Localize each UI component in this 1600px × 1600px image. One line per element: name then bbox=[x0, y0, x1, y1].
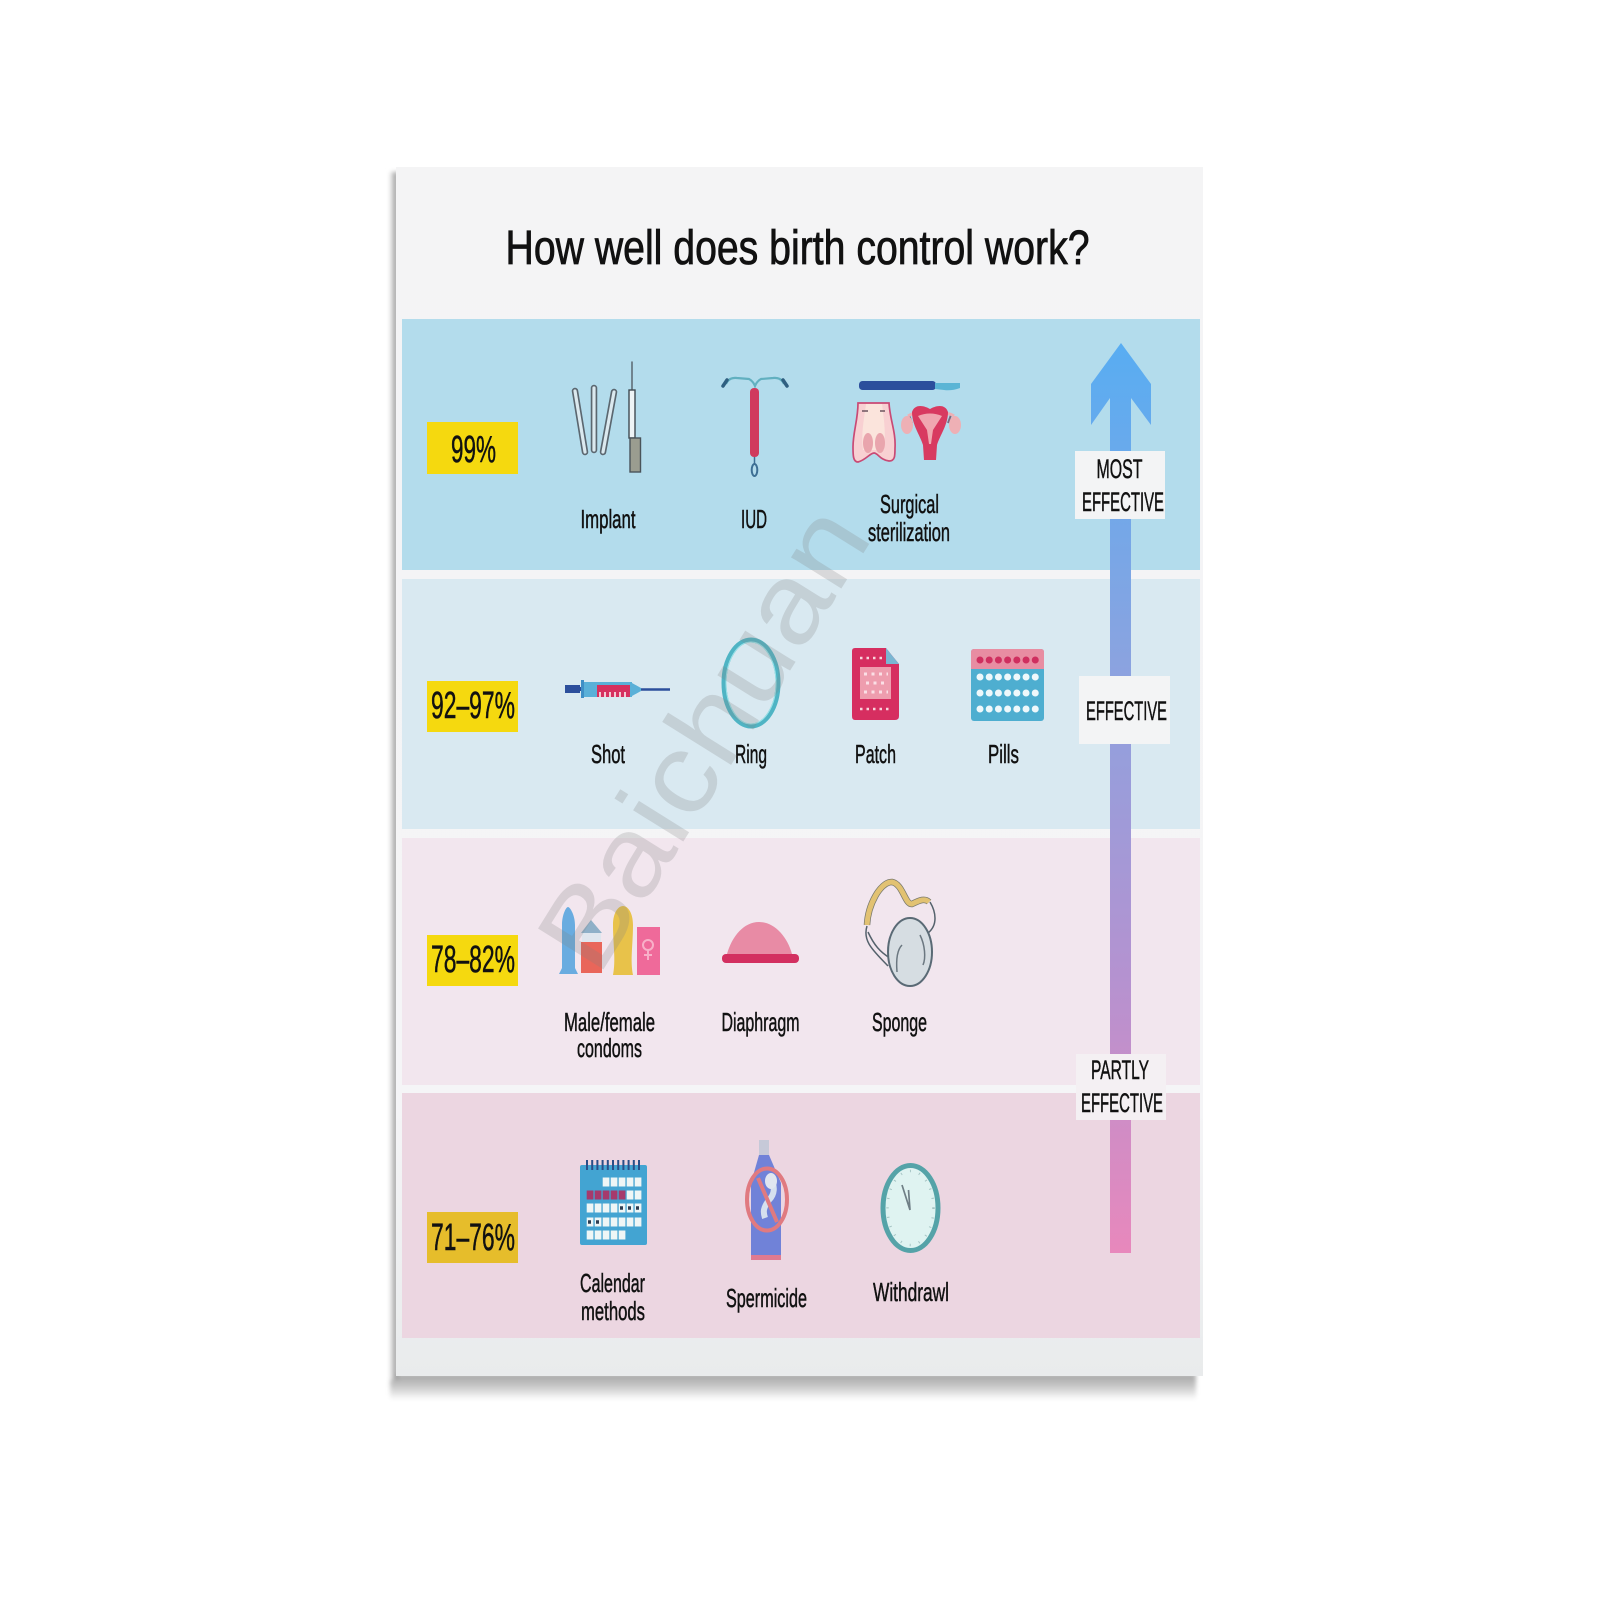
icon: patch bbox=[852, 648, 899, 720]
percentage badge: 78–82%: 78–82% bbox=[431, 939, 515, 981]
percentage badge: 71–76%: 71–76% bbox=[431, 1217, 515, 1259]
icon: pills bbox=[971, 649, 1044, 721]
poster shadow bbox=[389, 172, 1196, 1400]
label: Surgical sterilization bbox=[868, 489, 950, 547]
icon: ring bbox=[724, 640, 778, 726]
icon: implant bbox=[575, 362, 640, 472]
label: IUD: IUD bbox=[741, 504, 767, 534]
label: Surgical sterilization: Surgical bbox=[880, 489, 939, 519]
scale label: partly effective: EFFECTIVE bbox=[1081, 1088, 1163, 1118]
panel: 99% row bbox=[402, 319, 1200, 570]
icon: sponge bbox=[866, 882, 935, 986]
label: Spermicide: Spermicide bbox=[726, 1283, 807, 1313]
label: Calendar methods: Calendar bbox=[580, 1268, 645, 1298]
arrow: effectiveness scale bbox=[1091, 343, 1151, 1253]
scale label: effective: EFFECTIVE bbox=[1086, 696, 1167, 726]
panel: 71–76% row bbox=[402, 1093, 1200, 1338]
label: Male/female condoms bbox=[564, 1007, 655, 1063]
label: Shot: Shot bbox=[591, 739, 625, 769]
percentage badge: 71–76% bbox=[427, 1212, 518, 1263]
label: Pills: Pills bbox=[988, 739, 1019, 769]
icon: withdrawal clock bbox=[883, 1166, 938, 1250]
scale label: most effective: MOST bbox=[1096, 454, 1142, 484]
percentage badge: 99% bbox=[427, 422, 518, 474]
label: Surgical sterilization: sterilization bbox=[868, 517, 950, 547]
scale label: effective bbox=[1079, 676, 1170, 744]
title: How well does birth control work? bbox=[506, 222, 1090, 275]
label: Patch: Patch bbox=[855, 739, 896, 769]
percentage badge: 99%: 99% bbox=[451, 429, 496, 471]
scale label: partly effective: PARTLY bbox=[1091, 1055, 1149, 1085]
label: Sponge: Sponge bbox=[872, 1007, 927, 1037]
icon: spermicide bbox=[747, 1140, 787, 1260]
percentage badge: 92–97%: 92–97% bbox=[431, 685, 515, 727]
percentage badge: 92–97% bbox=[427, 681, 518, 732]
icon: condoms bbox=[559, 906, 660, 975]
panel: 78–82% row bbox=[402, 838, 1200, 1085]
label: Calendar methods: methods bbox=[581, 1296, 645, 1326]
icon: IUD bbox=[723, 378, 787, 476]
label: Calendar methods bbox=[580, 1268, 645, 1326]
percentage badge: 78–82% bbox=[427, 935, 518, 986]
icon: shot syringe bbox=[565, 680, 670, 698]
label: Ring: Ring bbox=[735, 739, 767, 769]
watermark: Baichuan bbox=[512, 483, 894, 991]
poster background bbox=[396, 167, 1203, 1376]
icon: surgical sterilization bbox=[853, 381, 961, 462]
label: Implant: Implant bbox=[580, 504, 636, 534]
label: Male/female condoms: Male/female bbox=[564, 1007, 655, 1037]
icon: calendar bbox=[580, 1165, 647, 1245]
label: Withdrawl: Withdrawl bbox=[873, 1277, 949, 1307]
label: Diaphragm: Diaphragm bbox=[722, 1007, 800, 1037]
scale label: partly effective bbox=[1076, 1054, 1166, 1120]
label: Male/female condoms: condoms bbox=[577, 1033, 642, 1063]
panel: 92–97% row bbox=[402, 579, 1200, 829]
scale label: most effective: EFFECTIVE bbox=[1082, 487, 1164, 517]
scale label: most effective bbox=[1075, 451, 1165, 519]
icon: diaphragm bbox=[722, 922, 799, 963]
